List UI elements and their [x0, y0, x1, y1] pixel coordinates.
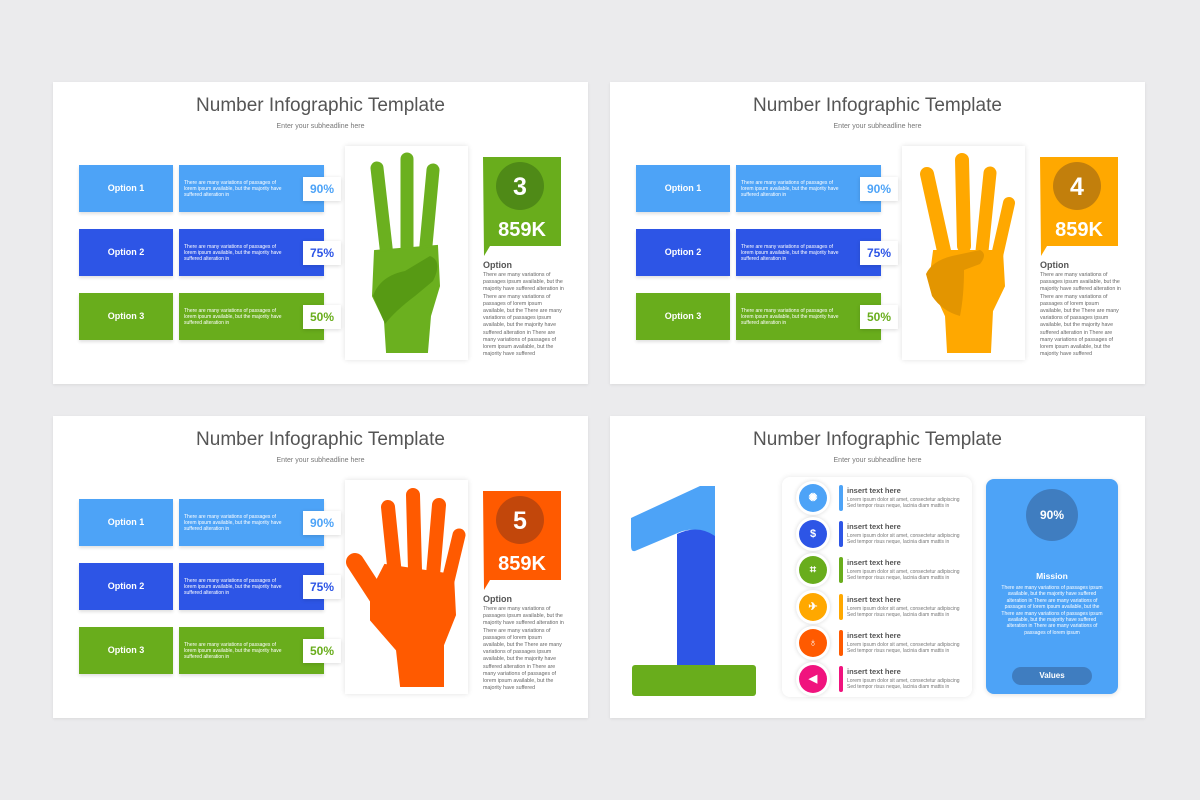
- option 2: [78, 563, 342, 613]
- slide: bottom-right number one: [610, 416, 1145, 718]
- option 1: [78, 499, 342, 549]
- values button: [1012, 667, 1092, 685]
- item 5: Sed tempor risus neque, lacinia diam mattis in: [847, 648, 949, 654]
- values button: Values: [1039, 671, 1065, 680]
- item 2: insert text here: [847, 522, 901, 531]
- item 3: insert text here: [847, 558, 901, 567]
- option 3: [78, 293, 342, 343]
- title: Number Infographic Template: [196, 429, 445, 450]
- option 2: Option 2: [108, 581, 144, 591]
- number flag: [483, 491, 561, 590]
- number flag: 5: [513, 507, 527, 535]
- subtitle: Enter your subheadline here: [834, 123, 921, 130]
- item 2: Lorem ipsum dolor sit amet, consectetur adipiscing: [847, 533, 960, 539]
- item 6: insert text here: [847, 667, 901, 676]
- option 3: 50%: [867, 310, 891, 324]
- option 3: 50%: [310, 310, 334, 324]
- option 3: [78, 627, 342, 677]
- option 1: 90%: [867, 182, 891, 196]
- item 4: Lorem ipsum dolor sit amet, consectetur adipiscing: [847, 606, 960, 612]
- option 1: There are many variations of passages of lorem ipsum available, but the majority have suffered alteration in: [184, 514, 282, 532]
- item 4: ✈: [808, 601, 818, 613]
- item 6: ◀: [809, 673, 817, 685]
- option text: There are many variations of passages ipsum available, but the majority have suffered alteration in There are many variations of passages of lorem ipsum available, but the There are many variations of passages ipsum available, but the majority have suffered alteration in There are many variations of passages of lorem ipsum available, but the majority have suffered: [483, 606, 564, 691]
- option 3: Option 3: [665, 311, 701, 321]
- slide: top-right four fingers: [610, 82, 1145, 384]
- option 2: 75%: [310, 580, 334, 594]
- option 3: There are many variations of passages of lorem ipsum available, but the majority have suffered alteration in: [741, 308, 839, 326]
- item 2: $: [810, 528, 816, 540]
- item 1: [794, 480, 960, 516]
- item 5: ♁: [809, 637, 817, 649]
- option 1: There are many variations of passages of lorem ipsum available, but the majority have suffered alteration in: [741, 180, 839, 198]
- option 3: There are many variations of passages of lorem ipsum available, but the majority have suffered alteration in: [184, 642, 282, 660]
- number flag: [483, 157, 561, 256]
- option heading: Option: [483, 594, 512, 604]
- hand card: three fingers: [345, 146, 468, 360]
- item 5: Lorem ipsum dolor sit amet, consectetur adipiscing: [847, 642, 960, 648]
- option 1: There are many variations of passages of lorem ipsum available, but the majority have suffered alteration in: [184, 180, 282, 198]
- option 2: [635, 229, 900, 279]
- list card: [782, 477, 972, 697]
- item 5: [794, 624, 960, 662]
- option 2: Option 2: [108, 247, 144, 257]
- item 4: insert text here: [847, 595, 901, 604]
- number flag: 859K: [1055, 219, 1103, 241]
- option 1: 90%: [310, 182, 334, 196]
- item 4: [794, 588, 960, 626]
- subtitle: Enter your subheadline here: [277, 457, 364, 464]
- option 3: Option 3: [108, 311, 144, 321]
- item 1: Lorem ipsum dolor sit amet, consectetur adipiscing: [847, 497, 960, 503]
- item 2: Sed tempor risus neque, lacinia diam mattis in: [847, 539, 949, 545]
- number flag: 859K: [498, 219, 546, 241]
- item 1: insert text here: [847, 486, 901, 495]
- number flag: [1040, 157, 1118, 256]
- option text: There are many variations of passages ipsum available, but the majority have suffered alteration in There are many variations of passages of lorem ipsum available, but the There are many variations of passages ipsum available, but the majority have suffered alteration in There are many variations of passages of lorem ipsum available, but the majority have suffered: [483, 272, 564, 357]
- mission heading: Mission: [1036, 571, 1068, 581]
- option heading: Option: [1040, 260, 1069, 270]
- title: Number Infographic Template: [753, 429, 1002, 450]
- item 3: Sed tempor risus neque, lacinia diam mattis in: [847, 575, 949, 581]
- percent circle: [1026, 489, 1078, 541]
- option heading: Option: [483, 260, 512, 270]
- option 2: There are many variations of passages of lorem ipsum available, but the majority have suffered alteration in: [741, 244, 839, 262]
- item 4: Sed tempor risus neque, lacinia diam mattis in: [847, 612, 949, 618]
- item 6: [794, 660, 960, 698]
- option 1: Option 1: [665, 183, 701, 193]
- big number 1: [631, 486, 756, 696]
- option 1: [78, 165, 342, 215]
- option 2: There are many variations of passages of lorem ipsum available, but the majority have suffered alteration in: [184, 244, 282, 262]
- option 2: Option 2: [665, 247, 701, 257]
- item 3: Lorem ipsum dolor sit amet, consectetur adipiscing: [847, 569, 960, 575]
- slide: bottom-left five fingers: [53, 416, 588, 718]
- option 1: Option 1: [108, 183, 144, 193]
- hand card: four fingers: [902, 146, 1025, 360]
- title: Number Infographic Template: [196, 95, 445, 116]
- number flag: 3: [513, 173, 527, 201]
- option 2: 75%: [867, 246, 891, 260]
- option 3: Option 3: [108, 645, 144, 655]
- item 5: insert text here: [847, 631, 901, 640]
- option 2: There are many variations of passages of lorem ipsum available, but the majority have suffered alteration in: [184, 578, 282, 596]
- subtitle: Enter your subheadline here: [834, 457, 921, 464]
- subtitle: Enter your subheadline here: [277, 123, 364, 130]
- title: Number Infographic Template: [753, 95, 1002, 116]
- slide: top-left three fingers: [53, 82, 588, 384]
- item 1: Sed tempor risus neque, lacinia diam mattis in: [847, 503, 949, 509]
- option 1: 90%: [310, 516, 334, 530]
- option 3: 50%: [310, 644, 334, 658]
- option 3: There are many variations of passages of lorem ipsum available, but the majority have suffered alteration in: [184, 308, 282, 326]
- option 3: [635, 293, 900, 343]
- mission card: [986, 479, 1118, 694]
- option 1: Option 1: [108, 517, 144, 527]
- number flag: 859K: [498, 553, 546, 575]
- item 2: [794, 516, 960, 552]
- item 6: Sed tempor risus neque, lacinia diam mattis in: [847, 684, 949, 690]
- item 1: ✺: [808, 492, 818, 504]
- number flag: 4: [1070, 173, 1084, 201]
- mission text: There are many variations of passages ipsum available, but the majority have suffered alteration in There are many variations of passages of lorem ipsum available, but the There are many variations of passages ipsum available, but the majority have suffered alteration in There are many variations of passages of lorem ipsum: [1001, 585, 1103, 636]
- option 2: [78, 229, 342, 279]
- option text: There are many variations of passages ipsum available, but the majority have suffered alteration in There are many variations of passages of lorem ipsum available, but the There are many variations of passages ipsum available, but the majority have suffered alteration in There are many variations of passages of lorem ipsum available, but the majority have suffered: [1040, 272, 1121, 357]
- option 1: [635, 165, 900, 215]
- option 2: 75%: [310, 246, 334, 260]
- percent circle: 90%: [1040, 508, 1064, 522]
- item 6: Lorem ipsum dolor sit amet, consectetur adipiscing: [847, 678, 960, 684]
- item 3: [794, 552, 960, 588]
- item 3: ⌗: [810, 564, 816, 576]
- hand card: five fingers: [345, 480, 468, 694]
